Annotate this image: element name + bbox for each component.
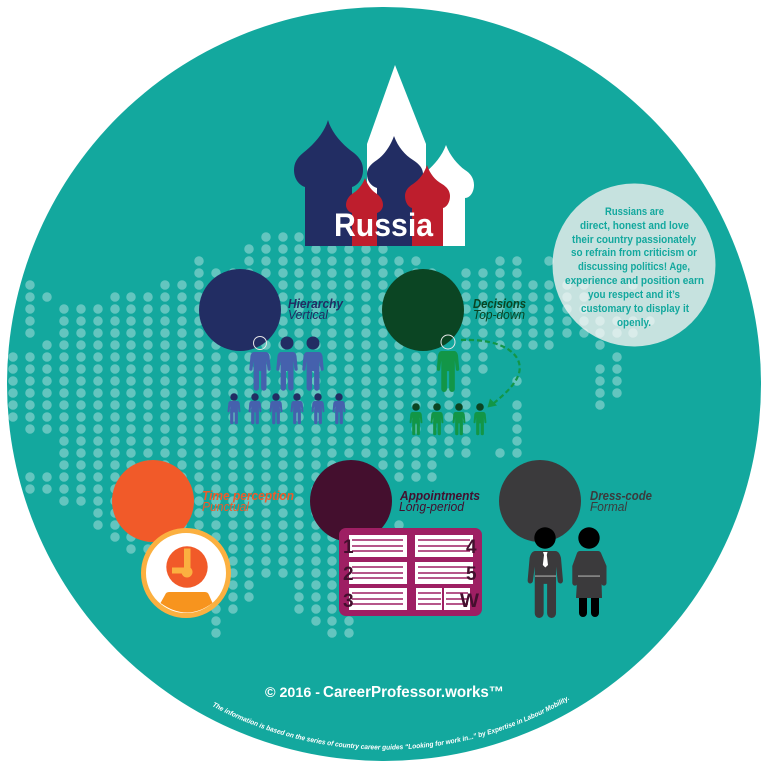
icon: decisions figures: [410, 335, 486, 435]
panel: quote bubble text: [565, 206, 704, 329]
label: hierarchy: [288, 297, 344, 322]
copyright line: © 2016 -: [265, 685, 320, 700]
label: time perception: Punctual: [202, 500, 250, 514]
icon: hierarchy figures: [228, 336, 345, 424]
panel: quote bubble text: their country passionately: [572, 234, 697, 246]
icon: calendar: 3: [343, 591, 354, 612]
icon: cathedral domes with title: [294, 65, 474, 246]
panel: quote bubble text: you respect and it’s: [588, 289, 680, 301]
title: Russia: [334, 207, 433, 243]
label: dress-code: Formal: [590, 500, 628, 514]
label: decisions: Top-down: [473, 308, 525, 322]
panel: appointments: [310, 460, 482, 616]
label: hierarchy: Vertical: [288, 308, 329, 322]
curved source note: The information is based on the series of country career guides “Looking for work in...” by Expertise in Labour Mobility.: [213, 696, 570, 751]
label: appointments: [399, 489, 480, 514]
label: time perception: [202, 489, 294, 514]
arrow: top-down decision flow: [461, 340, 520, 408]
panel: quote bubble text: openly.: [617, 317, 651, 329]
panel: quote bubble text: customary to display it: [581, 303, 689, 315]
label: dress-code: [590, 489, 652, 514]
icon: calendar: 2: [343, 564, 354, 585]
icon: calendar: [339, 528, 482, 616]
brand name: CareerProfessor.works™: [323, 684, 504, 701]
panel: quote bubble text: so refrain from criticism or: [571, 247, 698, 259]
icon: woman in dress: [572, 527, 606, 617]
panel: dress-code: [499, 460, 652, 618]
panel: time perception: [112, 460, 294, 616]
quote bubble background: [552, 184, 716, 346]
panel: quote bubble text: experience and position earn: [565, 275, 704, 287]
panel: decisions: [382, 269, 526, 435]
icon: calendar: 4: [466, 537, 477, 558]
label: dress-code: Dress-code: [590, 489, 652, 503]
icon: calendar: 1: [343, 537, 354, 558]
panel: hierarchy: [199, 269, 345, 424]
icon: calendar: W: [460, 591, 479, 612]
label: appointments: Appointments: [399, 489, 480, 503]
label: decisions: [473, 297, 526, 322]
panel: quote bubble text: Russians are: [605, 206, 664, 218]
label: appointments: Long-period: [399, 500, 465, 514]
dotted map of Russia: [13, 237, 650, 634]
label: hierarchy: Hierarchy: [288, 297, 344, 311]
panel: quote bubble text: direct, honest and love: [580, 220, 689, 232]
icon: man in suit: [528, 527, 563, 618]
label: time perception: Time perception: [202, 489, 294, 503]
icon: calendar: 5: [466, 564, 477, 585]
panel: quote bubble text: discussing politics! Age,: [578, 261, 690, 273]
icon: clock person: [144, 530, 228, 616]
label: decisions: Decisions: [473, 297, 526, 311]
